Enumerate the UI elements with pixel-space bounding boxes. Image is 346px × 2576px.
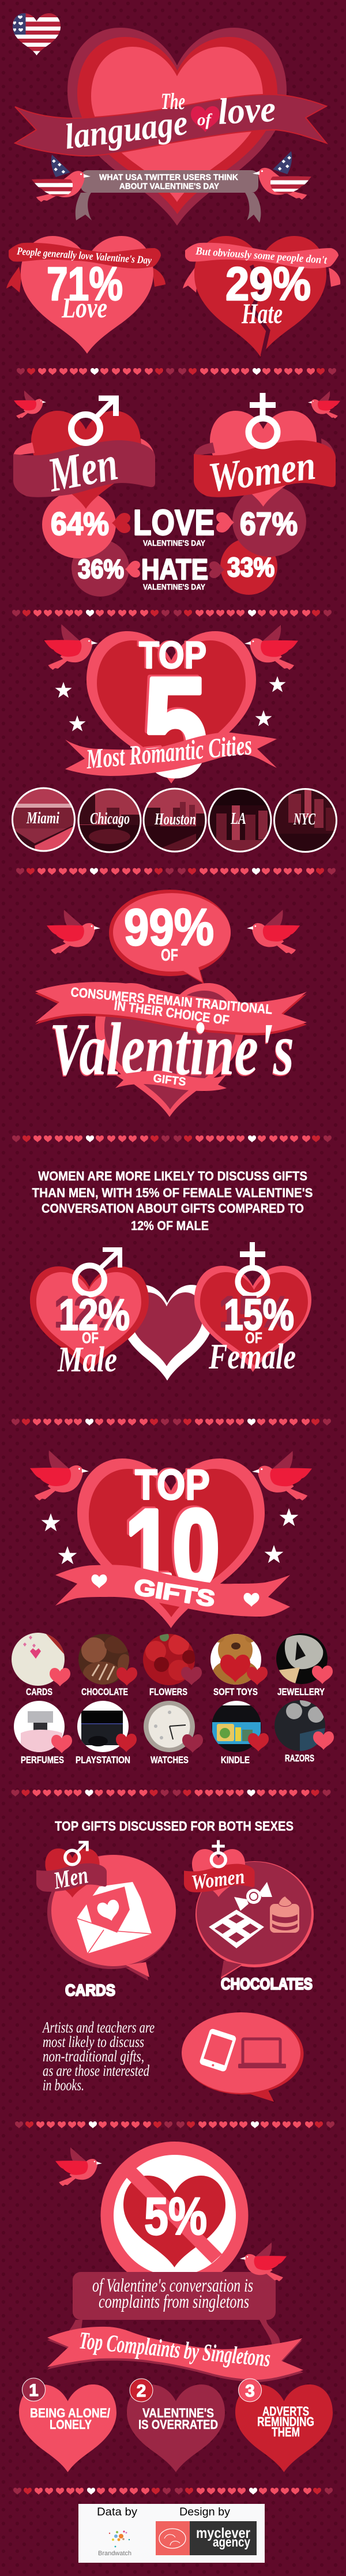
panel: 5% no-love sign — [55, 2142, 287, 2354]
love and hate statistics: 67% — [240, 505, 298, 542]
speech bubble — [109, 890, 231, 984]
panel: women badge — [194, 393, 336, 507]
panel: 99% of consumers — [35, 890, 307, 1117]
complaint 1 heart — [19, 2378, 116, 2472]
love and hate statistics: LOVE — [133, 503, 215, 543]
panel: top 10 gifts heading: TOP — [133, 1460, 208, 1508]
complaints banner: complaints from singletons — [99, 2292, 249, 2312]
heading: top gifts for both sexes: TOP GIFTS DISCUSSED FOR BOTH SEXES — [55, 1818, 294, 1833]
panel: men cards bubble: CARDS — [65, 1981, 115, 1999]
gift: kindle: KINDLE — [221, 1754, 250, 1765]
love and hate statistics: 36% — [78, 554, 124, 584]
complaint 2 heart: VALENTINE'S — [142, 2406, 214, 2420]
ribbon tails — [63, 2320, 280, 2354]
title text: love — [217, 88, 277, 132]
panel: 15% female heart: 15% — [224, 1291, 294, 1340]
love and hate statistics — [51, 503, 298, 591]
complaint 3 heart: ADVERTS — [262, 2404, 309, 2418]
gift: watches — [144, 1701, 203, 1765]
centre heart — [121, 1285, 214, 1381]
icon: laptop — [238, 2039, 286, 2068]
gift: soft toys: SOFT TOYS — [213, 1686, 258, 1697]
panel: 5% no-love sign: 5% — [144, 2187, 207, 2246]
text block: artists and teachers: most likely to discuss — [43, 2033, 144, 2050]
city: Chicago: Chicago — [90, 810, 130, 828]
panel: top 10 gifts heading: 10 — [123, 1486, 217, 1608]
gift: perfumes — [14, 1701, 72, 1765]
city: LA — [208, 788, 273, 854]
text block: artists and teachers — [42, 2019, 155, 2094]
icon: envelope with heart — [77, 1882, 152, 1953]
panel: 29% hate heart — [183, 236, 340, 357]
complaint 1 heart: BEING ALONE/ — [30, 2406, 110, 2420]
city: Chicago — [78, 789, 142, 854]
gift: chocolate: CHOCOLATE — [81, 1686, 128, 1697]
icon: flag bird right — [253, 151, 311, 200]
panel: women chocolates bubble — [195, 1861, 314, 1993]
gift: watches: WATCHES — [151, 1754, 189, 1765]
panel: 99% of consumers: GIFTS — [152, 1072, 187, 1089]
panel: top 5 heading: TOP — [137, 633, 205, 676]
icon: flag bird left — [32, 155, 91, 202]
gift: razors — [274, 1700, 334, 1762]
panel: men cards bubble — [47, 1855, 176, 1999]
city: Houston — [143, 788, 208, 854]
icon: bird right — [308, 391, 340, 418]
panel: 71% love heart: People generally love Valentine's Day — [16, 246, 152, 267]
panel: 15% female heart: 15% — [219, 1288, 290, 1337]
credits box — [78, 2504, 265, 2563]
panel: 99% of consumers: CONSUMERS REMAIN TRADITIONAL — [70, 984, 273, 1017]
logo: myclever agency: myclever — [196, 2525, 250, 2541]
subtitle banner: ABOUT VALENTINE'S DAY — [119, 181, 219, 192]
panel: 15% female heart: Female — [208, 1337, 296, 1377]
panel: top 10 gifts heading: GIFTS — [133, 1574, 217, 1612]
panel: 12% male heart: 12% — [59, 1291, 130, 1340]
city: Miami: Miami — [26, 809, 59, 827]
icon: birds — [47, 910, 300, 954]
panel: women chocolates bubble: CHOCOLATES — [221, 1975, 313, 1993]
gift: perfumes: PERFUMES — [21, 1754, 64, 1765]
icon: stars — [55, 676, 286, 732]
complaints banner: of Valentine's conversation is — [92, 2275, 253, 2296]
logo: myclever agency: agency — [213, 2534, 250, 2549]
city: LA: LA — [230, 810, 246, 828]
small women badge: Women — [190, 1865, 246, 1894]
icon: USA flag heart — [13, 13, 61, 55]
title text: The — [161, 88, 185, 114]
complaint 2 heart: 2 — [137, 2382, 146, 2401]
gift: cards: CARDS — [26, 1686, 52, 1697]
text block: artists and teachers: non-traditional gifts, — [43, 2048, 144, 2065]
panel: top 5 heading: 5 — [141, 647, 205, 803]
city: NYC — [273, 789, 338, 853]
panel: 71% love heart: 71% — [47, 258, 123, 310]
complaint 3 heart: 3 — [245, 2382, 255, 2401]
panel: top 10 gifts heading: TOP — [135, 1461, 210, 1509]
panel: 12% male heart: OF — [82, 1329, 99, 1347]
panel: top 10 gifts heading: 10 — [125, 1487, 220, 1610]
gift: jewellery: JEWELLERY — [277, 1686, 325, 1697]
panel: 99% of consumers: IN THEIR CHOICE OF — [113, 998, 230, 1028]
gift: cards — [12, 1633, 70, 1697]
icon: bird right — [240, 2243, 287, 2281]
icon: bird left — [14, 391, 46, 418]
complaint 2 heart: IS OVERRATED — [138, 2417, 218, 2432]
text block: artists and teachers: in books. — [43, 2076, 84, 2094]
panel: top 5 heading — [44, 624, 298, 805]
icon: cake — [270, 1896, 299, 1933]
icon: stars — [42, 1508, 298, 1564]
panel: 99% of consumers: 99% — [124, 899, 214, 957]
love and hate statistics: VALENTINE'S DAY — [143, 539, 205, 548]
gift: jewellery — [276, 1633, 333, 1697]
title text — [62, 88, 277, 157]
love hate ovals — [42, 486, 306, 597]
panel: 12% male heart — [30, 1247, 149, 1379]
panel: men badge: Men — [43, 436, 122, 503]
icon: bird left — [55, 2147, 102, 2186]
gift: razors: RAZORS — [285, 1753, 314, 1764]
panel: 15% female heart — [194, 1242, 311, 1377]
panel: men badge — [13, 396, 155, 509]
city: Miami — [12, 788, 76, 854]
love and hate statistics: 33% — [227, 552, 274, 582]
icon: birds — [44, 624, 298, 670]
panel: top 5 heading: Most Romantic Cities — [85, 730, 253, 775]
love and hate statistics: 64% — [51, 505, 109, 542]
title ribbon — [15, 95, 326, 156]
complaint 3 heart: THEM — [272, 2425, 300, 2439]
panel: device bubble — [182, 2012, 303, 2102]
panel: 29% hate heart: Hate — [241, 297, 283, 329]
icon: birds — [30, 1450, 312, 1501]
complaint 1 heart: LONELY — [50, 2417, 92, 2432]
panel: 12% male heart: Male — [57, 1340, 117, 1379]
small men badge — [36, 1841, 107, 1898]
panel: top 5 heading: TOP — [139, 633, 206, 676]
logo: Brandwatch: Brandwatch — [98, 2550, 131, 2557]
panel: 12% male heart: 12% — [54, 1288, 125, 1337]
text block: women discuss gifts — [32, 1169, 313, 1233]
complaint 3 heart: REMINDING — [257, 2414, 314, 2429]
complaints banner — [73, 2272, 276, 2320]
icon: candy — [234, 1882, 272, 1911]
panel: 29% hate heart: 29% — [225, 258, 311, 310]
complaint 2 heart — [127, 2379, 225, 2472]
ribbon — [35, 984, 307, 1036]
gift: playstation: PLAYSTATION — [76, 1754, 130, 1765]
text block: women discuss gifts: CONVERSATION ABOUT GIFTS COMPARED TO — [42, 1201, 304, 1216]
love and hate statistics: HATE — [141, 553, 208, 586]
title heart: layered hearts — [67, 28, 287, 226]
panel: 71% love heart: Love — [61, 291, 107, 324]
panel: 71% love heart — [6, 236, 166, 354]
gift: playstation — [76, 1701, 137, 1765]
text block: women discuss gifts: 12% OF MALE — [131, 1218, 209, 1233]
text block: artists and teachers: as are those interested — [43, 2062, 149, 2079]
credits box: Data by — [97, 2506, 138, 2518]
panel: women badge: Women — [206, 442, 318, 501]
panel: 15% female heart: OF — [245, 1329, 262, 1347]
icon: chocolate bar — [209, 1910, 264, 1948]
complaint 1 heart: 1 — [29, 2381, 39, 2400]
logo: myclever agency — [156, 2521, 257, 2555]
small men badge: Men — [51, 1862, 91, 1895]
gift: chocolate — [78, 1634, 137, 1697]
small ribbon — [115, 1071, 227, 1091]
credits box: Design by — [179, 2506, 231, 2518]
text block: women discuss gifts: WOMEN ARE MORE LIKELY TO DISCUSS GIFTS — [38, 1169, 307, 1183]
small women badge — [184, 1840, 255, 1897]
panel: top 10 gifts heading — [30, 1450, 312, 1628]
panel: 29% hate heart: But obviously some people don't — [195, 245, 328, 267]
title text: of — [197, 110, 213, 129]
gift: soft toys — [210, 1632, 268, 1697]
city: Houston: Houston — [154, 811, 196, 828]
love and hate statistics: VALENTINE'S DAY — [143, 583, 205, 591]
panel: top 5 heading: 5 — [143, 649, 208, 805]
logo: Brandwatch — [98, 2530, 131, 2557]
complaint 3 heart — [235, 2379, 333, 2472]
city: NYC: NYC — [293, 811, 315, 828]
subtitle banner: WHAT USA TWITTER USERS THINK — [99, 173, 238, 182]
gift: flowers — [143, 1632, 202, 1697]
gift: flowers: FLOWERS — [149, 1686, 187, 1697]
text block: women discuss gifts: THAN MEN, WITH 15% OF FEMALE VALENTINE'S — [32, 1186, 313, 1200]
title text: language — [62, 103, 190, 157]
icon: phone — [199, 2028, 237, 2072]
panel: 99% of consumers: OF — [161, 946, 178, 965]
text block: artists and teachers: Artists and teachers are — [42, 2019, 155, 2036]
subtitle banner — [76, 170, 261, 223]
gift: kindle — [212, 1701, 269, 1765]
